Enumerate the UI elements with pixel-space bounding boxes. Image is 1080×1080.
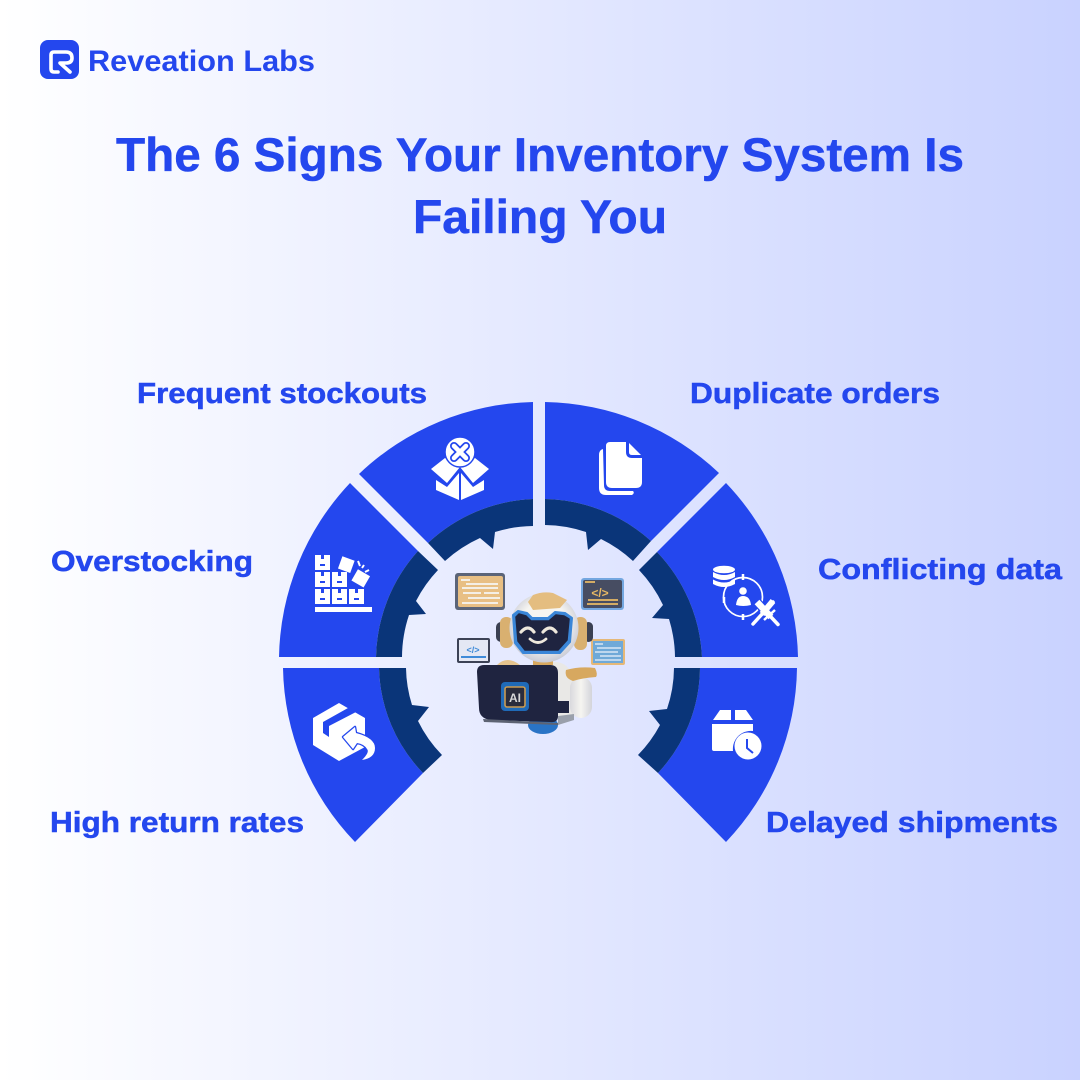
- logo wordmark: Reveation Labs: [88, 45, 315, 78]
- icon: stacked boxes: [315, 555, 372, 612]
- panel: code window: </>: [591, 586, 609, 600]
- segment: Frequent stockouts: [359, 402, 533, 561]
- segment: Duplicate orders: [545, 402, 719, 561]
- segment: Conflicting data: [639, 483, 798, 657]
- label: High return rates: High return rates: [50, 807, 304, 839]
- logo: Reveation Labs: [40, 40, 315, 79]
- icon: data conflict: [713, 566, 778, 625]
- label: Delayed shipments: Delayed shipments: [766, 807, 1058, 839]
- title: [116, 128, 964, 243]
- AI chip: AI: [509, 691, 521, 705]
- illustration: AI robot with laptop: [455, 573, 625, 734]
- icon: duplicate document: [599, 442, 642, 495]
- icon: return package: [313, 703, 375, 761]
- logo mark: [40, 40, 79, 79]
- label: Frequent stockouts: Frequent stockouts: [137, 378, 427, 410]
- panel: small code card: </>: [466, 645, 480, 655]
- segment: High return rates: [283, 668, 442, 842]
- icon: open box with x: [431, 437, 489, 500]
- segment: Delayed shipments: [638, 668, 797, 842]
- icon: delayed box: [712, 710, 762, 760]
- panel: blue document: [591, 639, 625, 665]
- label: Conflicting data: Conflicting data: [818, 554, 1063, 586]
- title: The 6 Signs Your Inventory System Is: [116, 128, 964, 181]
- panel: code window: [581, 578, 624, 610]
- segment: Overstocking: [279, 483, 438, 657]
- label: Duplicate orders: Duplicate orders: [690, 378, 940, 410]
- label: Overstocking: Overstocking: [51, 546, 253, 578]
- title: Failing You: [413, 190, 667, 243]
- robot head: [496, 592, 593, 665]
- laptop: [477, 665, 558, 725]
- panel: tan document: [455, 573, 505, 610]
- robot body and arm: [497, 660, 597, 734]
- panel: small code card: [457, 638, 490, 663]
